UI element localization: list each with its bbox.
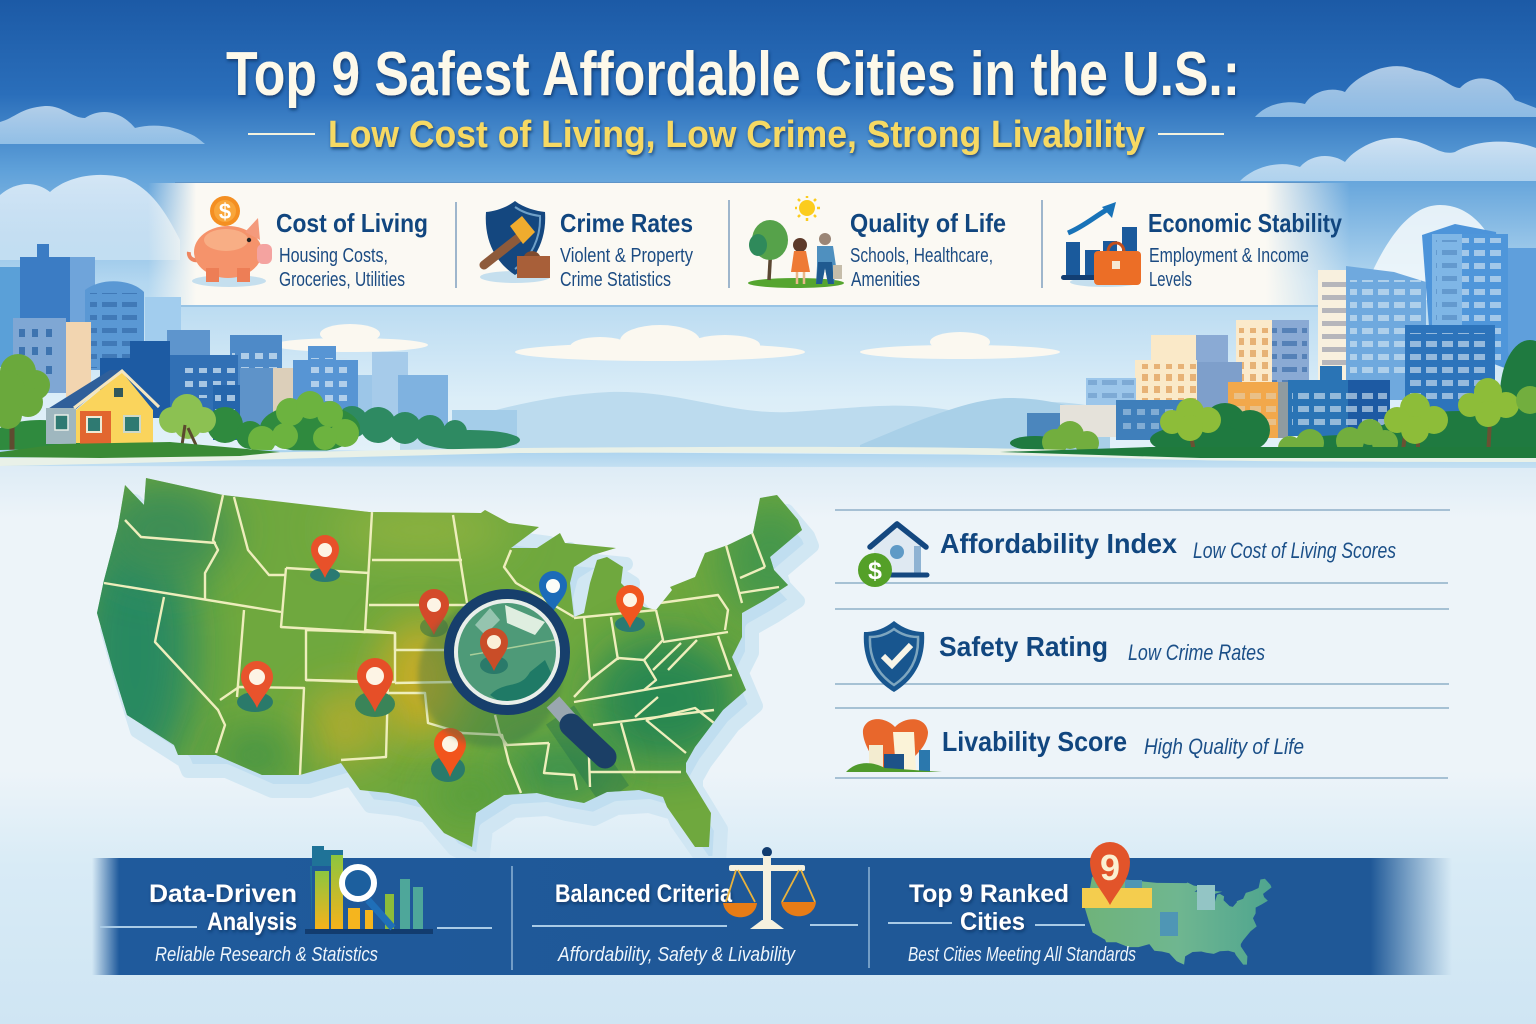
river and shore xyxy=(0,442,1536,468)
text: crime rates detail xyxy=(560,245,693,291)
text: crime rates detail: Violent & Property xyxy=(560,245,693,267)
pin: Arizona xyxy=(237,661,273,712)
panel: score list xyxy=(835,510,1450,778)
hills xyxy=(400,392,1110,450)
text: economic stability detail: Employment & Income xyxy=(1149,245,1309,267)
state borders xyxy=(104,495,779,793)
text: crime rates detail: Crime Statistics xyxy=(560,269,671,291)
background lower panel xyxy=(0,462,1536,1024)
heading: cost of living: Cost of Living xyxy=(276,208,428,238)
icon: growth chart and briefcase xyxy=(1061,202,1141,287)
rules xyxy=(100,923,1085,928)
text: quality of life detail xyxy=(850,245,993,291)
text: data-driven analysis: Data-Driven xyxy=(149,880,297,908)
icon: affordability house xyxy=(858,524,927,587)
text: affordability, safety and livability: Affordability, Safety & Livability xyxy=(557,944,796,966)
icon: mini map with 9 pin xyxy=(1082,842,1272,965)
text: top 9 ranked cities xyxy=(909,880,1069,936)
title: Top 9 Safest Affordable Cities in the U.S.: xyxy=(226,40,1240,109)
panel background: criteria strip xyxy=(148,182,1350,306)
subtitle rules xyxy=(248,133,1224,135)
icon: shield and gavel xyxy=(480,201,550,283)
pin: Texas xyxy=(431,728,466,782)
icon: people with tree and sun xyxy=(748,196,844,288)
left skyline xyxy=(0,244,517,445)
panel: methodology band xyxy=(92,842,1452,975)
icon: affordability house: $ xyxy=(868,557,882,585)
pin: Ohio xyxy=(615,585,645,632)
text: cost of living detail xyxy=(279,245,405,291)
note: low cost of living scores: Low Cost of Living Scores xyxy=(1193,538,1396,563)
icon: balance scale xyxy=(723,847,816,929)
text: quality of life detail: Schools, Healthcare, xyxy=(850,245,993,267)
icon: livability heart and homes xyxy=(846,719,942,772)
house xyxy=(46,370,159,444)
pin: Nebraska xyxy=(419,589,449,637)
background sky xyxy=(0,0,1536,470)
icon: mini map with 9 pin: 9 xyxy=(1100,847,1120,888)
note: high quality of life: High Quality of Life xyxy=(1144,734,1304,759)
panel: criteria strip xyxy=(189,196,1342,291)
heading: economic stability: Economic Stability xyxy=(1148,208,1342,238)
heading: livability score: Livability Score xyxy=(942,726,1127,757)
map of the U.S. xyxy=(75,470,820,863)
text: cost of living detail: Housing Costs, xyxy=(279,245,388,267)
text: data-driven analysis xyxy=(149,880,297,936)
clouds xyxy=(0,66,1536,361)
map fill xyxy=(97,478,802,847)
left trees xyxy=(0,354,520,460)
icon: piggy bank xyxy=(189,196,272,287)
magnifying glass xyxy=(418,594,605,757)
text: economic stability detail: Levels xyxy=(1149,269,1192,291)
text: economic stability detail xyxy=(1149,245,1309,291)
text: top 9 ranked cities: Top 9 Ranked xyxy=(909,880,1069,908)
pin: under lens xyxy=(480,628,508,674)
pin: Wisconsin blue xyxy=(539,571,567,612)
icon: safety shield xyxy=(864,621,924,692)
subtitle: Low Cost of Living, Low Crime, Strong Livability xyxy=(328,114,1145,156)
right trees xyxy=(1010,340,1536,460)
icon: piggy bank: $ xyxy=(219,199,231,224)
pin: New Mexico xyxy=(355,658,395,717)
heading: crime rates: Crime Rates xyxy=(560,208,693,238)
map halo xyxy=(107,494,812,863)
heading: quality of life: Quality of Life xyxy=(850,208,1006,238)
text: cost of living detail: Groceries, Utilities xyxy=(279,269,405,291)
heading: safety rating: Safety Rating xyxy=(939,631,1108,662)
heading: affordability index: Affordability Index xyxy=(940,528,1177,559)
text: data-driven analysis: Analysis xyxy=(207,908,297,936)
pin: Wyoming xyxy=(310,535,340,582)
text: balanced criteria: Balanced Criteria xyxy=(555,880,733,908)
note: low crime rates: Low Crime Rates xyxy=(1128,640,1265,665)
text: top 9 ranked cities: Cities xyxy=(960,908,1025,936)
text: quality of life detail: Amenities xyxy=(851,269,920,291)
icon: bar chart with magnifier xyxy=(305,846,433,934)
right skyline xyxy=(1027,224,1536,440)
text: reliable research and statistics: Reliable Research & Statistics xyxy=(155,944,378,966)
text: best cities meeting all standards: Best Cities Meeting All Standards xyxy=(908,944,1136,966)
